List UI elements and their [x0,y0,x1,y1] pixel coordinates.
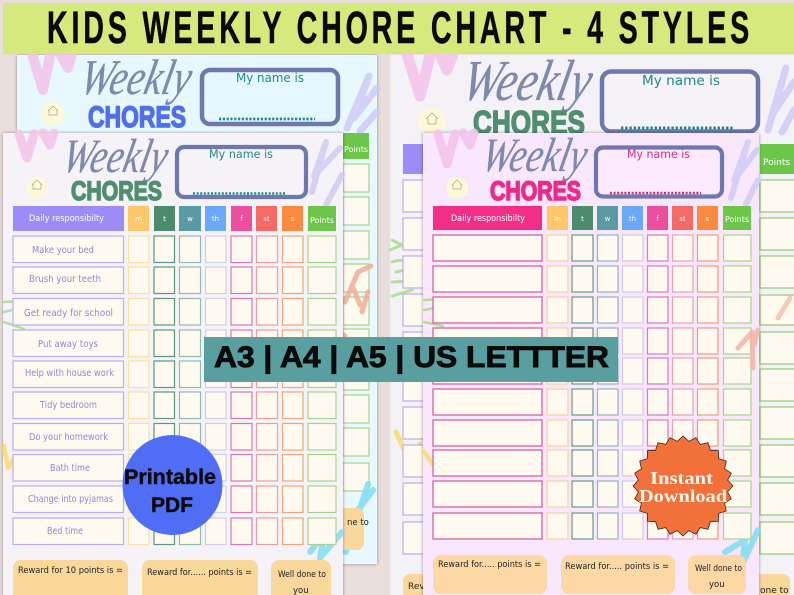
table header: t [163,215,166,223]
name dots [610,192,701,194]
responsibility labels: Brush your teeth [29,274,101,285]
name box [596,148,722,196]
reward boxes [13,560,331,595]
table header: th [212,215,219,223]
points header [343,133,369,159]
table header [433,206,751,230]
title: CHORES: CHORES [490,176,581,206]
day cells [547,235,751,539]
badge: printable pdf: Printable [124,466,216,489]
panel: front right chart, pink style [423,129,759,595]
panel: back right chart, green style: Points [763,158,790,168]
salmon scribble [738,330,758,368]
day cells [128,236,336,544]
table header: t [581,215,584,223]
title: Weekly: Weekly [58,130,174,183]
logo [26,177,48,199]
points cells right [760,180,794,554]
salmon scribble over cells [778,298,790,318]
responsibility labels: Change into pyjamas [28,494,113,505]
logo [418,108,446,136]
responsibility labels: Get ready for school [24,308,113,319]
table header: m [554,215,561,223]
table header: Daily responsibilty [451,214,525,224]
scribbles over cells [338,266,373,552]
row boxes left [403,180,427,554]
title: Weekly: Weekly [76,49,198,105]
reward boxes: Reward for..... points is = [438,560,541,570]
table header: s [291,215,295,223]
points header [760,144,794,174]
table header: Points [310,216,334,225]
panel: back right chart, green style: Rev [408,582,425,592]
daily header remainder [403,144,427,174]
responsibility labels: Make your bed [32,245,94,256]
table header [13,206,336,231]
name prompt: My name is [627,147,690,161]
table header: f [656,215,659,223]
reward boxes: Reward for...... points is = [147,568,252,578]
title: CHORES: CHORES [473,104,585,141]
responsibility labels: Do your homework [29,432,108,443]
responsibility labels: Bath time [50,463,90,474]
panel: front left chart, green and purple style [3,130,343,595]
name prompt: My name is [209,147,273,161]
reward boxes: Reward for 10 points is = [18,566,123,576]
name prompt: My name is [642,73,720,89]
badge: printable pdf: PDF [151,494,193,517]
reward box remainder, right [755,574,790,595]
table header: m [135,215,142,223]
name dots [621,126,733,130]
logo [446,177,468,199]
badge: printable pdf [122,435,222,535]
badge: instant download: Download [639,486,727,506]
table header: Daily responsibilty [29,214,104,224]
table header: th [629,215,636,223]
name dots [219,118,315,120]
panel: back left chart, blue style [17,49,377,564]
table header: f [240,215,243,223]
responsibility labels [24,245,114,537]
reward boxes [433,555,746,594]
reward boxes: Well done to [278,570,326,580]
table header: Points [725,215,749,224]
title: Weekly: Weekly [477,129,593,182]
name box [602,72,758,132]
table header: st [679,215,686,223]
logo [41,102,65,126]
badge: instant download [633,436,733,536]
table header: w [605,215,611,223]
table header: w [187,215,193,223]
title: CHORES: CHORES [88,101,186,134]
name box [177,147,306,197]
responsibility labels: Bed time [47,526,83,537]
responsibility labels: Tidy bedroom [39,400,97,411]
responsibility rows [13,236,124,544]
panel: back left chart, blue style: Points [344,145,368,154]
responsibility rows [433,235,542,539]
title: Weekly: Weekly [457,49,599,113]
name prompt: My name is [236,71,304,85]
table header: st [263,215,270,223]
title: CHORES: CHORES [71,176,162,206]
name dots [193,192,285,195]
responsibility labels: Put away toys [38,339,98,350]
reward box remainder [335,508,364,550]
responsibility labels: Help with house work [25,368,114,379]
points cells [343,164,369,491]
table header: s [706,215,710,223]
reward boxes: you [709,580,725,590]
reward boxes: Reward for..... points is = [565,562,669,572]
banner [3,2,794,54]
badge: instant download: Instant [650,468,713,488]
panel: back right chart, green style [390,49,794,595]
paper sizes text: A3 | A4 | A5 | US LETTTER [214,341,609,374]
banner: paper sizes [204,337,618,382]
panel: back left chart, blue style: ne to [347,518,369,528]
reward boxes: Well done to [695,564,742,574]
name box [202,70,338,124]
reward box remainder, left [403,574,443,595]
